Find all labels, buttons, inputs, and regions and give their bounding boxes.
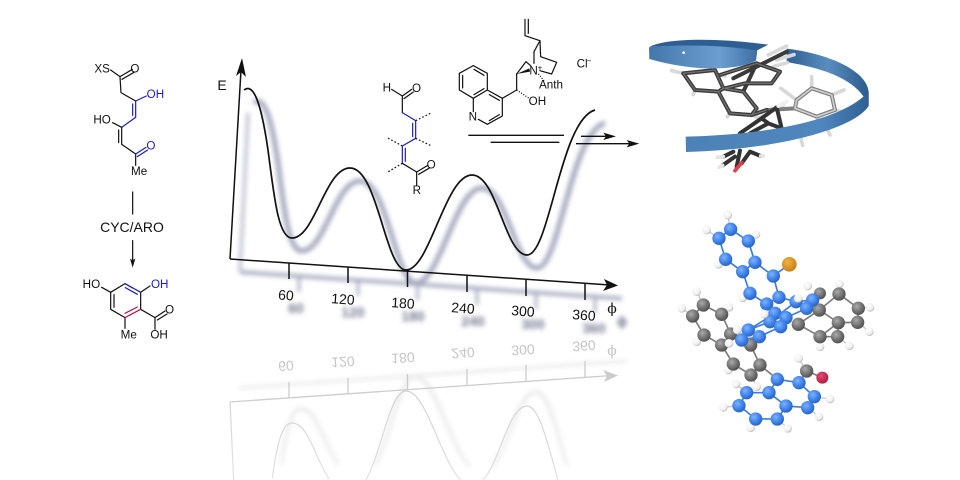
equilibrium lines and arrows (468, 133, 639, 147)
polyketide precursor structure (93, 63, 164, 178)
drop shadow of energy diagram: 360 (582, 320, 606, 336)
axis label phi: ϕ (607, 301, 617, 317)
polyketide precursor structure: OH (147, 88, 164, 101)
axis ticks (289, 263, 585, 300)
x axis tick labels: 300 (511, 302, 535, 320)
reaction arrow with CYC/ARO label (100, 192, 164, 268)
gray carbon atoms (686, 287, 865, 382)
red oxygen atom (816, 372, 828, 384)
x axis tick labels: 60 (278, 286, 295, 304)
lower fragment below ribbon (723, 151, 761, 167)
ribbon back section (787, 49, 869, 106)
orsellinic acid product structure: HO (83, 278, 100, 291)
orange sulfur-like atom (782, 257, 797, 272)
cinchona alkaloid catalyst structure: N (529, 64, 538, 77)
cinchona alkaloid catalyst structure: Cl (577, 57, 588, 70)
x axis tick labels (278, 286, 596, 324)
drop shadow of energy diagram: 60 (288, 300, 304, 316)
hydrogen bonds (682, 215, 870, 428)
orsellinic acid product structure (83, 278, 174, 342)
foreground hydrogens (725, 294, 803, 348)
x axis tick labels: 120 (331, 290, 355, 308)
ball and stick molecule model (677, 211, 874, 433)
x axis tick labels: 240 (451, 299, 475, 317)
reflection of energy diagram: ϕ (607, 344, 617, 360)
orsellinic acid product structure: OH (151, 278, 168, 291)
polyketide precursor structure: Me (131, 165, 147, 178)
hydrogen atoms (677, 211, 874, 433)
helical ribbon molecule model (649, 40, 869, 171)
orsellinic acid product structure: Me (121, 329, 137, 342)
polyketide precursor structure: XS (94, 63, 110, 76)
hydrogen tips behind (672, 46, 848, 145)
x axis tick labels: 360 (572, 306, 596, 324)
reflection of energy diagram: 120 (331, 353, 355, 371)
polyketide precursor structure: O (130, 63, 139, 76)
cinchona alkaloid catalyst structure: Anth (539, 79, 563, 92)
drop shadow of energy diagram: 240 (461, 313, 485, 329)
y axis arrow (230, 58, 246, 259)
drop shadow of energy diagram: 180 (401, 308, 425, 324)
reflection of energy diagram: 360 (572, 337, 596, 355)
reflection of energy diagram: 300 (511, 341, 535, 359)
reflection of energy diagram: 240 (451, 344, 475, 362)
substrate fragment structure: O (412, 82, 421, 95)
reflection of energy diagram: 180 (391, 349, 415, 367)
energy diagram (217, 58, 618, 324)
energy curve (244, 89, 595, 270)
reflection of energy diagram: 60 (278, 357, 295, 375)
ribbon top band (649, 40, 768, 51)
substrate fragment structure (383, 81, 436, 197)
cinchona alkaloid catalyst structure: OH (529, 95, 546, 108)
substrate fragment structure: R (413, 184, 421, 197)
cinchona alkaloid catalyst structure: − (587, 56, 592, 65)
molecule sticks (672, 46, 848, 171)
drop shadow of energy diagram (240, 102, 627, 336)
drop shadow of energy diagram: ϕ (617, 313, 627, 329)
axis label E: E (217, 77, 227, 93)
drop shadow of energy diagram: 300 (521, 316, 545, 332)
gray bonds (693, 294, 858, 383)
polyketide precursor structure: HO (93, 114, 111, 127)
x axis tick labels: 180 (391, 294, 415, 312)
x axis arrow (230, 259, 618, 291)
reflection of energy diagram (230, 337, 627, 480)
light phenyl ring (767, 88, 835, 117)
dark aromatic framework (683, 52, 787, 115)
orsellinic acid product structure: OH (150, 329, 168, 342)
reaction arrow with CYC/ARO label: CYC/ARO (100, 219, 164, 235)
polyketide precursor structure: O (146, 139, 155, 152)
cinchona alkaloid catalyst structure (459, 19, 592, 124)
ribbon front band (686, 92, 869, 152)
blue carbon atoms (712, 223, 821, 426)
lower stacked ring (740, 107, 782, 133)
substrate fragment structure: H (383, 81, 391, 94)
blue bonds (719, 229, 814, 419)
orsellinic acid product structure: O (165, 304, 174, 317)
cinchona alkaloid catalyst structure: N (469, 111, 477, 124)
cinchona alkaloid catalyst structure: + (538, 63, 543, 72)
substrate fragment structure: O (427, 159, 436, 172)
drop shadow of energy diagram: 120 (341, 304, 365, 320)
